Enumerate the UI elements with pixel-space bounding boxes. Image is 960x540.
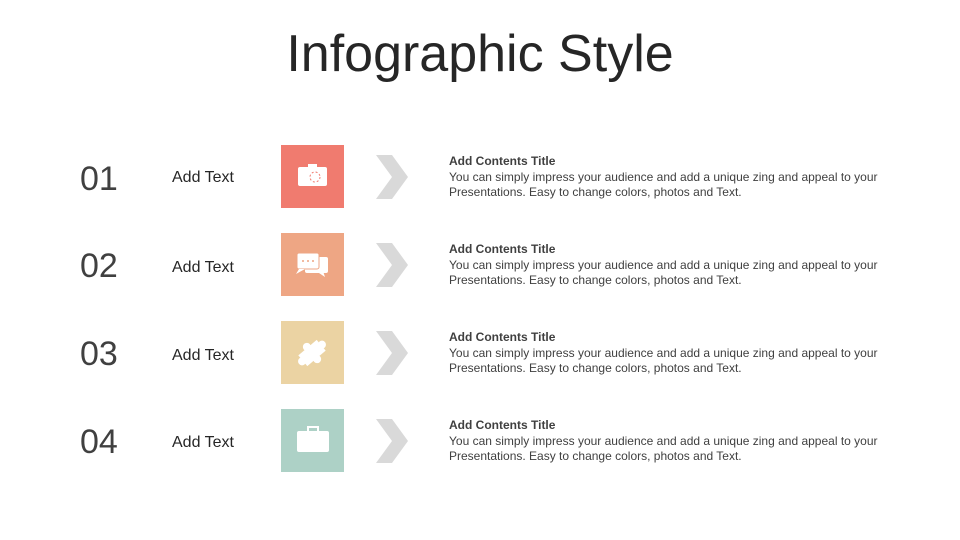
- row 3: [80, 321, 878, 384]
- description: Add Contents Title: [449, 330, 555, 344]
- description: You can simply impress your audience and add a unique zing and appeal to your Presentations. Easy to change colors, photos and Text.: [449, 170, 878, 199]
- number 04: 04: [80, 423, 118, 461]
- number 03: 03: [80, 335, 118, 373]
- label: Add Text: [172, 347, 234, 364]
- arrow: [376, 243, 408, 287]
- description: Add Contents Title: [449, 154, 555, 168]
- description: You can simply impress your audience and add a unique zing and appeal to your Presentations. Easy to change colors, photos and Text.: [449, 346, 878, 375]
- label: Add Text: [172, 169, 234, 186]
- description: [449, 330, 878, 375]
- label: Add Text: [172, 434, 234, 451]
- number 01: 01: [80, 160, 118, 198]
- arrow: [376, 331, 408, 375]
- icon: chat: [281, 233, 344, 296]
- icon: briefcase: [281, 409, 344, 472]
- number 02: 02: [80, 247, 118, 285]
- description: [449, 154, 878, 199]
- arrow: [376, 419, 408, 463]
- title: Infographic Style: [286, 25, 674, 83]
- label: Add Text: [172, 259, 234, 276]
- row 2: [80, 233, 878, 296]
- row 4: [80, 409, 878, 472]
- description: Add Contents Title: [449, 418, 555, 432]
- description: You can simply impress your audience and add a unique zing and appeal to your Presentations. Easy to change colors, photos and Text.: [449, 258, 878, 287]
- description: You can simply impress your audience and add a unique zing and appeal to your Presentations. Easy to change colors, photos and Text.: [449, 434, 878, 463]
- arrow: [376, 155, 408, 199]
- description: [449, 242, 878, 287]
- row 1: [80, 145, 878, 208]
- description: [449, 418, 878, 463]
- description: Add Contents Title: [449, 242, 555, 256]
- icon: puzzle: [281, 321, 344, 384]
- icon: camera: [281, 145, 344, 208]
